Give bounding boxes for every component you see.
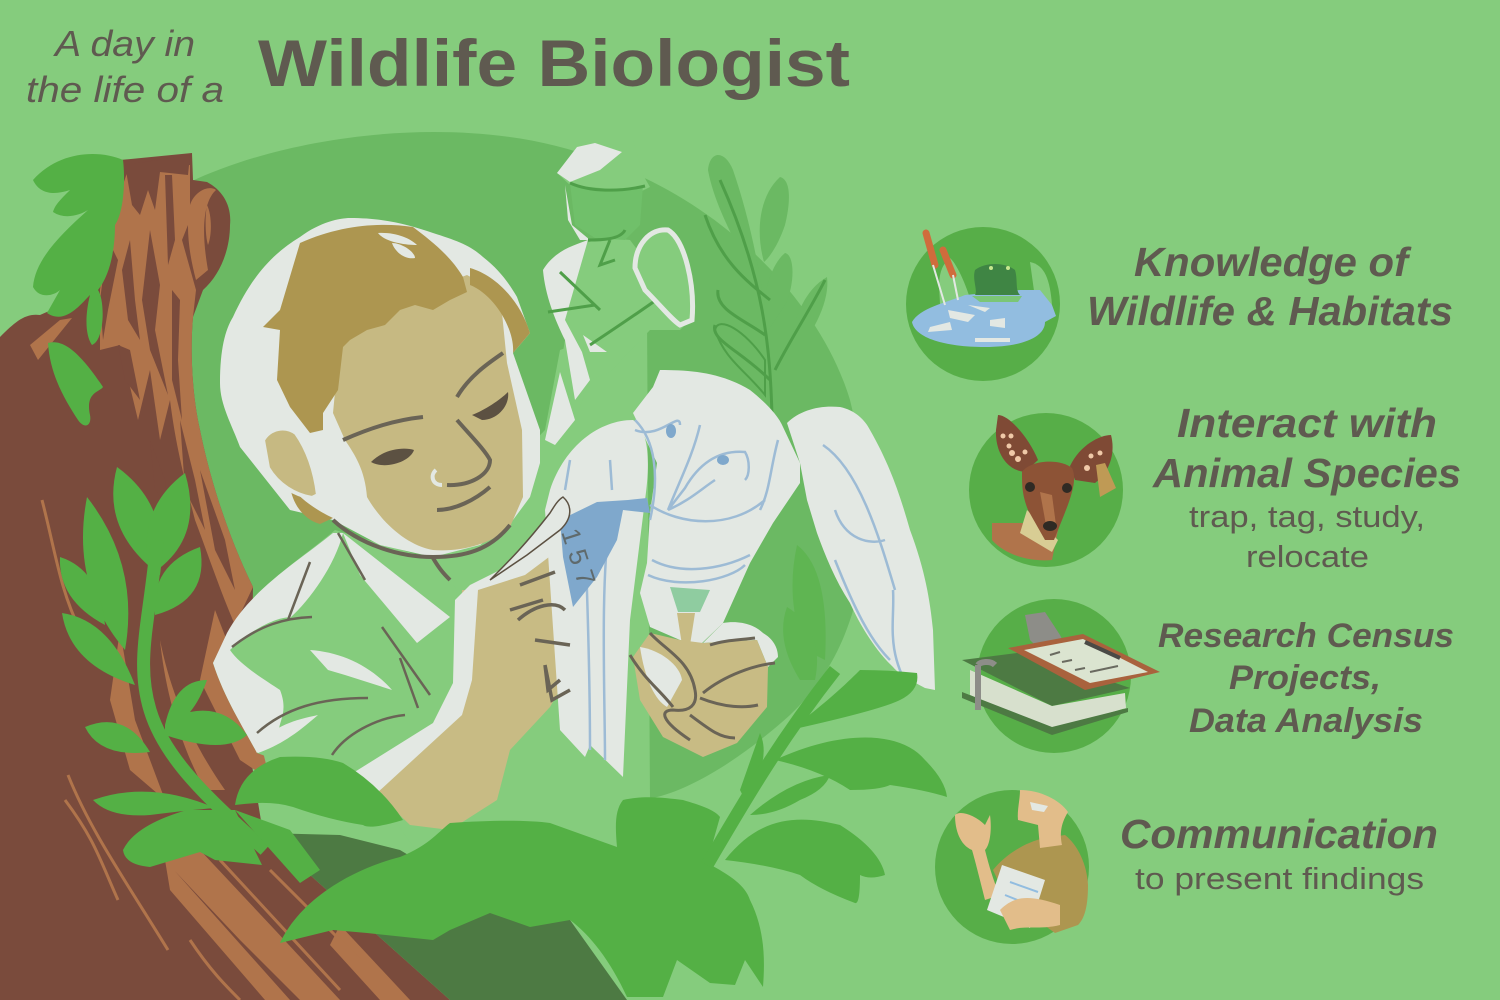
tag and hand: 157 [555, 525, 602, 589]
label: Interact with [1177, 400, 1437, 446]
leg skin [677, 613, 695, 645]
bottom leaf cluster [280, 797, 764, 997]
title: the life of a [26, 69, 224, 110]
head white [220, 218, 540, 557]
label: Data Analysis [1189, 702, 1423, 740]
near wing [545, 420, 648, 777]
leaves top left on trunk [33, 154, 124, 425]
label: Animal Species [1152, 450, 1461, 496]
label [1158, 617, 1454, 740]
far wing [787, 407, 935, 690]
dark foreground shade [263, 833, 627, 1000]
panel: interact with animal species [969, 400, 1461, 574]
right fern [707, 545, 947, 903]
left fern [60, 467, 403, 883]
panel: knowledge of wildlife and habitats [906, 227, 1453, 381]
hat [557, 140, 650, 192]
label: relocate [1246, 539, 1369, 574]
plant behind owl [705, 155, 827, 415]
leg gap [670, 587, 710, 612]
label: trap, tag, study, [1189, 499, 1425, 534]
arm white outline [353, 500, 575, 793]
shirt [213, 530, 457, 790]
icon: pond with frog [906, 227, 1060, 381]
tag and hand [490, 497, 778, 757]
pale area behind figures [380, 318, 660, 870]
title: A day in [53, 23, 195, 64]
hair [263, 225, 467, 433]
panel: research census [962, 599, 1454, 753]
eyes and features [371, 392, 508, 465]
lower hand [703, 622, 778, 667]
shirt and body [543, 238, 690, 440]
icon: person presenting [935, 790, 1089, 944]
biologist [213, 218, 583, 830]
label: Projects, [1229, 659, 1381, 697]
label: Research Census [1158, 617, 1454, 655]
face [333, 275, 523, 550]
label [1120, 811, 1438, 896]
label: Wildlife & Habitats [1087, 288, 1453, 334]
label [1152, 400, 1461, 574]
label: Knowledge of [1134, 239, 1412, 285]
small owl [635, 230, 693, 325]
label [1087, 239, 1453, 334]
owl body [633, 370, 800, 645]
owl [545, 370, 935, 777]
figure in background: researcher with owl [543, 140, 693, 445]
panel: communication [935, 790, 1438, 944]
shirt white shading [213, 533, 343, 753]
arm [377, 540, 583, 830]
owl lines [565, 420, 910, 760]
background green circle [190, 132, 866, 820]
title: Wildlife Biologist [258, 26, 850, 100]
icon: fawn [969, 413, 1123, 567]
label: to present findings [1135, 861, 1424, 896]
title [26, 23, 850, 110]
tree trunk [0, 153, 450, 1000]
bark highlights [30, 165, 253, 625]
ear [263, 429, 318, 498]
bark dark stripes [100, 155, 235, 590]
label: Communication [1120, 811, 1438, 857]
icon: clipboard on book [962, 599, 1160, 753]
side hair [470, 268, 530, 353]
face [570, 183, 643, 240]
